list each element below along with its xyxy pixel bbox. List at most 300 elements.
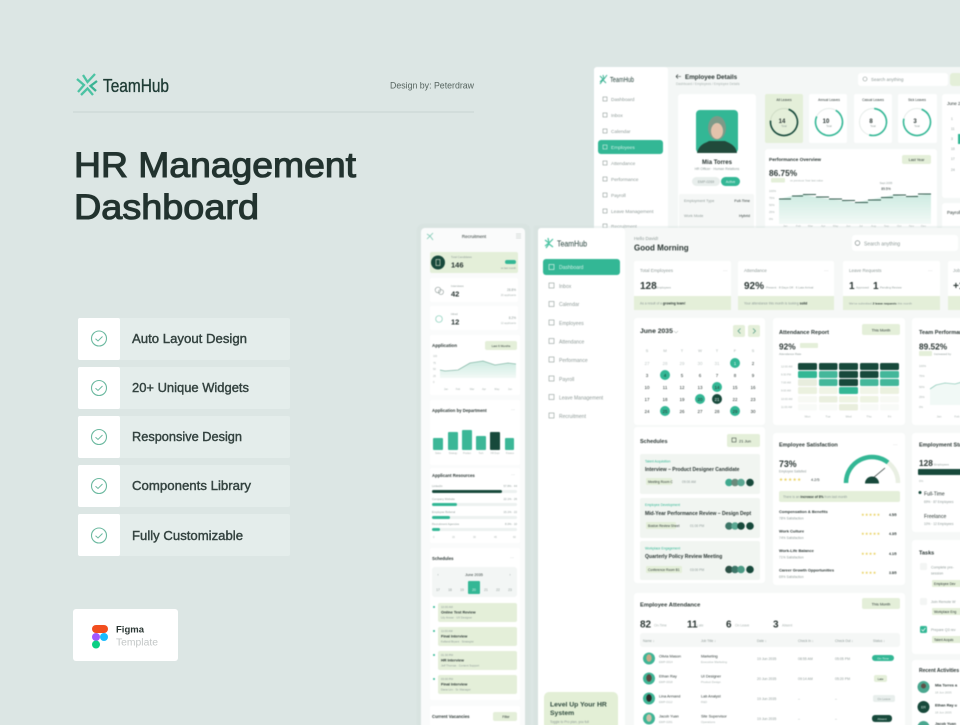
satisfaction breakdown: Career Growth Opportunities <box>779 568 835 572</box>
calendar card: 30 <box>750 409 756 414</box>
performance overview chart: Jun <box>846 224 851 228</box>
employment status card, cropped: 10% · 12 Employees <box>924 522 954 526</box>
application line chart: Jun <box>508 387 513 391</box>
attendance report heatmap: Attendance Report <box>779 330 829 336</box>
row: Olivia Mason <box>643 652 894 664</box>
application line chart: Last 6 Months <box>492 344 511 348</box>
employee attendance table: Check In ↕ <box>798 639 814 643</box>
schedule items: Kelland Bryant · Strategist <box>441 640 474 644</box>
leave balance cards: 14 <box>779 119 786 125</box>
satisfaction breakdown: Work-Life Balance <box>779 548 815 553</box>
performance overview chart: Apr <box>821 224 825 228</box>
calendar and payroll cards, cropped: 24 <box>951 168 955 172</box>
schedule: policy review: Conference Room B1 <box>648 568 680 572</box>
employee satisfaction card: ··· <box>893 442 898 447</box>
tasks card, cropped: Talent Acquis <box>934 638 954 642</box>
performance overview chart: 86.75% <box>769 168 798 178</box>
row: Jacob Yuan: – <box>798 717 800 721</box>
calendar card: 13 <box>697 385 703 390</box>
stat: interviews: Interviews <box>451 284 464 288</box>
row: Ethan Ray: Late <box>878 677 884 681</box>
attendance report heatmap: 12:00 AM <box>781 364 793 368</box>
applicant resources bars: 15.1% · 22 <box>503 510 517 514</box>
employment status card, cropped: 69% · 87 Employees <box>924 500 954 504</box>
search <box>852 235 958 251</box>
row: Lina Armand: 19 Jun 2035 <box>757 697 776 701</box>
schedules card: 21 Jun <box>739 438 751 444</box>
performance overview chart: Oct <box>897 224 902 228</box>
schedule items: HR Interview <box>441 658 464 662</box>
leave balance cards: Total <box>870 124 876 128</box>
sidebar: employee details: Attendance <box>611 161 636 167</box>
calendar and payroll cards, cropped: 11 <box>951 127 955 131</box>
satisfaction breakdown: 71% Satisfaction <box>779 556 804 560</box>
row: Olivia Mason: Olivia Mason <box>659 654 681 658</box>
satisfaction breakdown: ★★★★ <box>861 552 877 556</box>
schedule items: 01:30 PM <box>441 653 454 657</box>
row: Jacob Yuan: Site Supervisor <box>701 714 727 718</box>
calendar card: 4 <box>664 373 667 378</box>
employee satisfaction card: ★★★★★ <box>779 477 802 482</box>
row: Olivia Mason: On-Time <box>877 656 889 660</box>
application line chart: May <box>495 387 500 391</box>
team performance card, cropped: 50% <box>919 385 925 389</box>
employee attendance table <box>634 593 905 725</box>
stat: attendance <box>738 261 834 310</box>
application line chart: 100 <box>433 355 438 358</box>
recent activities card, cropped: ER <box>921 706 926 710</box>
calendar card: 29 <box>679 361 685 366</box>
application by department bars: Sales <box>435 453 442 455</box>
stat: total employees: As a result of a growing team! <box>640 302 685 306</box>
leave balance cards: Total <box>914 124 920 128</box>
performance overview chart: Aug <box>871 224 876 228</box>
application by department bars: HR Dept <box>491 452 500 455</box>
feature: 20+ Unique Widgets: 20+ Unique Widgets <box>132 381 249 395</box>
performance overview chart: Nov <box>909 224 915 228</box>
sidebar: employee details: TeamHub <box>610 77 634 84</box>
satisfaction breakdown: Work Culture <box>779 528 805 534</box>
employee satisfaction card: 73% <box>779 459 797 469</box>
applicant resources bars: 30 <box>473 536 476 539</box>
date strip: 23 <box>508 588 512 592</box>
schedule items: 03:00 PM <box>441 677 454 681</box>
header: employee details <box>676 73 960 86</box>
application line chart: Apr <box>482 387 486 391</box>
calendar card: 22 <box>732 397 738 402</box>
row: Lina Armand <box>643 692 895 704</box>
row: Ethan Ray: Ethan Ray <box>659 674 677 678</box>
calendar card <box>634 318 765 425</box>
schedule: policy review: 03:00 PM <box>690 568 704 572</box>
attendance summary <box>640 620 792 630</box>
attendance summary: 3 <box>773 620 779 630</box>
feature: 20+ Unique Widgets <box>78 367 290 409</box>
stat: leave requests: Leave Requests <box>849 268 882 273</box>
calendar card: 2 <box>752 361 755 366</box>
recent activities card, cropped: 18 Jun 2035 <box>935 690 952 694</box>
satisfaction breakdown: 3.8/5 <box>889 571 897 575</box>
header: employee details: Dashboard / Employees / Employee Details <box>676 82 740 86</box>
sidebar: employee details: Performance <box>611 177 639 183</box>
row: Olivia Mason: EMP-0014 <box>659 660 673 664</box>
tasks card, cropped: Tasks <box>919 550 934 556</box>
attendance report heatmap: Tue <box>825 414 831 418</box>
row: Olivia Mason: 08:55 AM <box>798 657 813 661</box>
gauge <box>846 457 898 484</box>
designer credit: Design by: Peterdraw <box>390 80 474 92</box>
sidebar: main dashboard: TeamHub <box>557 240 587 248</box>
schedule items: Dana Lim · Sr. Manager <box>441 688 471 692</box>
performance overview chart: Jul <box>859 224 863 228</box>
attendance report heatmap: 9:00 AM <box>781 388 792 392</box>
mobile schedules: Schedules <box>432 556 454 561</box>
application line chart: Feb <box>456 387 461 391</box>
title: HR Management <box>74 146 356 185</box>
stat: hired: 12 <box>451 318 459 326</box>
leave balance cards: 10 <box>823 119 830 125</box>
profile card: Hybrid <box>739 214 750 218</box>
applicant resources bars: 15 <box>452 536 455 539</box>
feature: Responsive Design: Responsive Design <box>132 430 242 444</box>
applicant resources bars: 57.8% · 44 <box>503 484 517 488</box>
attendance summary: On Leave <box>735 624 749 628</box>
window: recruitment mobile <box>417 224 530 725</box>
performance overview chart: 50% <box>769 203 775 207</box>
stat: total candidates: Total Candidates <box>451 255 472 259</box>
performance overview chart: 89.5% <box>881 187 891 191</box>
row: Lina Armand: R&D <box>701 700 707 704</box>
sidebar: main dashboard: Employees <box>559 321 584 327</box>
performance overview chart: Performance Overview <box>769 157 821 163</box>
tasks card, cropped <box>912 540 960 654</box>
application line chart: Mar <box>470 387 474 391</box>
stat: total candidates: 146 <box>451 260 464 270</box>
header: employee details: Employee Details <box>685 74 738 81</box>
date strip: 18 <box>448 588 452 592</box>
calendar card: 3 <box>646 373 649 378</box>
calendar card: 1 <box>734 361 737 366</box>
row: Jacob Yuan: Jacob Yuan <box>659 714 679 718</box>
feature: Responsive Design <box>78 416 290 458</box>
profile card: Mia Torres <box>702 160 733 166</box>
calendar card: 15 <box>732 385 738 390</box>
employee attendance table: Job Title ↕ <box>701 639 716 643</box>
applicant resources bars: 60 <box>513 536 516 539</box>
employment status card, cropped: Full-Time <box>924 492 945 498</box>
promo card: Level Up Your HR <box>550 702 607 708</box>
attendance report heatmap: Wed <box>845 414 852 418</box>
calendar and payroll cards, cropped: 3 <box>951 137 953 141</box>
schedule: interview: Talent Acquisition <box>645 460 671 464</box>
sidebar: main dashboard: Recruitment <box>559 414 587 420</box>
team performance card, cropped <box>912 318 960 425</box>
schedule: performance review <box>640 498 760 538</box>
calendar card: 6 <box>699 373 702 378</box>
stat: attendance: Your attendance this month is looking solid <box>744 302 807 306</box>
attendance summary: 11 <box>687 620 698 630</box>
date strip: 19 <box>460 588 464 592</box>
leave balance cards: Total <box>781 124 787 128</box>
row: Jacob Yuan: EMP-0261 <box>659 720 673 724</box>
satisfaction breakdown: 78% Satisfaction <box>779 516 804 520</box>
calendar card: 29 <box>732 409 738 414</box>
application line chart: 75 <box>433 362 436 365</box>
application by department bars: Strategy <box>449 452 458 455</box>
satisfaction breakdown <box>779 509 897 579</box>
profile card: EMP-0269 <box>698 180 714 184</box>
calendar card: 11 <box>663 385 668 390</box>
performance overview chart: vs previous Year last value <box>790 178 824 182</box>
calendar card: M <box>663 348 667 353</box>
performance overview chart <box>765 149 937 232</box>
leave balance cards: Casual Leaves <box>862 98 884 102</box>
performance overview chart: Last Year <box>909 158 925 162</box>
calendar card: 18 <box>662 397 668 402</box>
promo card: Toggle to Pro plan, you full <box>550 720 589 724</box>
attendance report heatmap: Fri <box>888 414 892 418</box>
attendance summary: Late <box>697 624 704 628</box>
attendance report heatmap: 92% <box>779 342 796 352</box>
feature: Auto Layout Design <box>78 318 290 360</box>
calendar card: W <box>698 348 702 353</box>
calendar card: June 2035 <box>640 328 673 335</box>
schedule items: Final Interview <box>441 682 467 686</box>
profile card: Full-Time <box>734 199 750 203</box>
employee satisfaction card: There is an increase of 8% from last month <box>783 495 847 499</box>
application by department bars: Product <box>463 452 471 455</box>
employee satisfaction card: Employee Satisfied <box>779 470 807 474</box>
date strip: 21 <box>484 588 488 592</box>
date strip: ‹ <box>437 572 439 577</box>
stat: attendance: 92% <box>744 281 764 292</box>
row: Olivia Mason: 05:05 PM <box>835 657 850 661</box>
attendance report heatmap: This Month <box>872 328 890 332</box>
attendance report heatmap <box>773 318 905 425</box>
leave balance cards <box>765 94 937 143</box>
sidebar: main dashboard: Attendance <box>559 340 585 346</box>
schedule: performance review: Boston Review Sheet <box>648 524 680 528</box>
stat: total employees: 128 <box>640 281 657 292</box>
attendance report heatmap: Mon <box>805 414 811 418</box>
tasks card, cropped: Prepare Q3 rev <box>931 628 956 632</box>
row: Ethan Ray: UI Designer <box>701 674 722 678</box>
applicant resources bars: Company Website <box>432 497 455 501</box>
calendar card: 7 <box>716 373 719 378</box>
schedule items: Online Test Review <box>441 610 476 614</box>
schedule items: 10:00 AM <box>441 605 453 609</box>
application line chart: 0 <box>433 381 435 384</box>
sidebar: employee details <box>594 67 668 232</box>
application by department bars: Application by Department <box>432 408 487 413</box>
tasks card, cropped: Complete pre- <box>931 566 955 570</box>
employment status card, cropped <box>912 433 960 532</box>
row: Ethan Ray: 20 Jun 2035 <box>757 677 776 681</box>
stat: interviews: 42 <box>451 290 459 298</box>
performance overview chart: 75% <box>769 196 775 200</box>
calendar card: T <box>681 348 684 353</box>
schedule: performance review: Employee Development <box>645 503 680 507</box>
title: Dashboard <box>74 188 259 227</box>
employee attendance table: This Month <box>872 602 890 606</box>
tasks card, cropped: Join Remote W <box>931 600 956 604</box>
row: Ethan Ray: EMP-0018 <box>659 680 673 684</box>
date strip: June 2035 <box>465 573 483 577</box>
calendar and payroll cards, cropped <box>942 94 960 232</box>
calendar card: S <box>646 348 649 353</box>
schedule: policy review <box>640 541 760 580</box>
feature: Components Library <box>78 465 290 507</box>
greeting: Good Morning <box>634 244 689 252</box>
sidebar: employee details: Inbox <box>611 113 623 119</box>
profile card: Work Mode <box>684 214 703 218</box>
performance overview chart: 25% <box>769 210 775 214</box>
application line chart: Application <box>432 343 457 348</box>
performance overview chart: Dec <box>921 224 927 228</box>
application by department bars <box>430 400 520 465</box>
employment status card, cropped: 128 <box>919 458 933 468</box>
team performance card, cropped: 89.52% <box>919 342 948 352</box>
team performance card, cropped: 75% <box>919 374 925 378</box>
attendance report heatmap: 11:00 AM <box>781 405 793 409</box>
profile card: Active <box>726 180 735 184</box>
satisfaction breakdown: 4.3/5 <box>889 532 897 536</box>
calendar card: 28 <box>662 361 668 366</box>
calendar and payroll cards, cropped: 1 <box>951 117 953 121</box>
employee attendance table: Check Out ↕ <box>835 639 853 643</box>
date strip: › <box>509 572 511 577</box>
recent activities card, cropped: Mia Torres a <box>935 684 958 688</box>
row: Ethan Ray: 05:20 PM <box>835 677 850 681</box>
applicant resources bars: Employee Referral <box>432 510 456 514</box>
employee attendance table: Status ↕ <box>873 639 885 643</box>
applicant resources bars: Applicant Resources <box>432 473 475 478</box>
leave balance cards: 8 <box>869 119 873 125</box>
recent activities card, cropped: Recent Activities <box>919 668 959 674</box>
feature: Fully Customizable: Fully Customizable <box>132 529 243 543</box>
profile card: HR Officer · Human Relations <box>695 167 740 171</box>
sidebar: employee details: Calendar <box>611 129 631 135</box>
calendar card: 16 <box>750 385 756 390</box>
calendar card: 24 <box>644 409 650 414</box>
row: Lina Armand: Lab Analyst <box>701 694 722 698</box>
row: Ethan Ray: Product Design <box>701 680 721 684</box>
leave balance cards: Annual Leaves <box>818 98 840 102</box>
row: Olivia Mason: Marketing <box>701 654 718 658</box>
schedule: interview: Meeting Room C <box>648 480 673 484</box>
window: main dashboard <box>534 226 960 725</box>
performance overview chart: Sep <box>884 224 889 228</box>
mobile header: Recruitment <box>462 234 487 239</box>
date strip: 22 <box>496 588 500 592</box>
row: Ethan Ray <box>643 672 887 684</box>
calendar card: 8 <box>734 373 737 378</box>
sidebar: main dashboard: Inbox <box>559 284 572 290</box>
header: employee details: Search anything <box>871 77 904 82</box>
stat: hired: 12 applicants <box>501 321 517 325</box>
row: Lina Armand: EMP-0112 <box>659 700 673 704</box>
application by department bars: ··· <box>511 407 515 412</box>
stat: leave requests: 1 <box>849 281 855 292</box>
calendar card: 28 <box>714 409 720 414</box>
stat: attendance: Attendance <box>744 268 767 273</box>
calendar card: F <box>734 348 737 353</box>
employee satisfaction card <box>773 433 905 585</box>
employee attendance table: Employee Attendance <box>640 602 701 608</box>
row: Jacob Yuan: Operations <box>701 720 716 724</box>
current vacancies: Current Vacancies <box>432 714 470 719</box>
calendar card: 30 <box>697 361 703 366</box>
applicant resources bars: 45 <box>494 536 497 539</box>
sidebar: main dashboard: Payroll <box>559 377 574 383</box>
attendance summary: Absent <box>782 624 792 628</box>
brand logo: TeamHub <box>77 74 169 96</box>
satisfaction breakdown: 4.5/5 <box>889 513 897 517</box>
feature: Fully Customizable <box>78 514 290 556</box>
row: Jacob Yuan: 19 Jun 2035 <box>757 717 776 721</box>
sidebar: employee details: Recruitment <box>611 224 638 230</box>
calendar card: 19 <box>679 397 685 402</box>
stat: leave requests <box>843 261 940 310</box>
performance overview chart: May <box>833 224 839 228</box>
sidebar: employee details: Employees <box>611 145 635 151</box>
calendar and payroll cards, cropped: 10 <box>951 147 955 151</box>
search: Search anything <box>864 242 900 248</box>
schedule: interview: Interview – Product Designer Candidate <box>645 467 740 473</box>
calendar card: 25 <box>662 409 668 414</box>
team performance card, cropped: Feb <box>954 414 960 418</box>
tasks card, cropped: Workplace Eng <box>934 610 956 614</box>
sidebar: employee details: Dashboard <box>611 97 635 103</box>
profile card: Employment Type <box>684 199 714 203</box>
row: Olivia Mason: Executive Marketing <box>701 660 727 664</box>
tasks card, cropped: session <box>931 572 943 576</box>
calendar card: 23 <box>750 397 756 402</box>
sidebar: main dashboard: Leave Management <box>559 396 604 402</box>
employment status card, cropped: Employees <box>934 462 949 466</box>
row: Lina Armand: – <box>835 697 837 701</box>
date strip: 20 <box>472 588 476 592</box>
sidebar: employee details: Leave Management <box>611 209 654 215</box>
calendar card: 27 <box>644 361 650 366</box>
figma template badge: Figma <box>116 624 145 634</box>
employee satisfaction card: Employee Satisfaction <box>779 442 838 448</box>
team performance card, cropped: Jan <box>937 414 942 418</box>
attendance report heatmap: 10:00 AM <box>781 397 793 401</box>
applicant resources bars: 8.0% · 10 <box>505 522 517 526</box>
leave balance cards: Sick Leaves <box>908 98 926 102</box>
recent activities card, cropped: Ethan Ray u <box>935 704 958 708</box>
performance overview chart: Sept 2035 <box>880 181 893 185</box>
row: Jacob Yuan: – <box>835 717 837 721</box>
leave balance cards: Total <box>826 124 832 128</box>
calendar card: 17 <box>644 397 650 402</box>
attendance summary: On-Time <box>654 624 667 628</box>
attendance report heatmap: Attendance Rate <box>779 352 802 356</box>
schedule: interview <box>640 454 760 494</box>
application line chart: Jan <box>444 387 449 391</box>
schedule: performance review: 01:00 PM <box>690 524 704 528</box>
performance overview chart: 0% <box>769 217 774 221</box>
stat: interviews: 20 applicants <box>501 293 517 297</box>
satisfaction breakdown: 74% Satisfaction <box>779 536 804 540</box>
attendance summary: 82 <box>640 620 652 630</box>
stat: hired: Hired <box>451 312 458 316</box>
stat: total employees <box>634 261 731 310</box>
team performance card, cropped: 100% <box>919 364 927 368</box>
date strip: 17 <box>436 588 440 592</box>
calendar card: 10 <box>644 385 650 390</box>
